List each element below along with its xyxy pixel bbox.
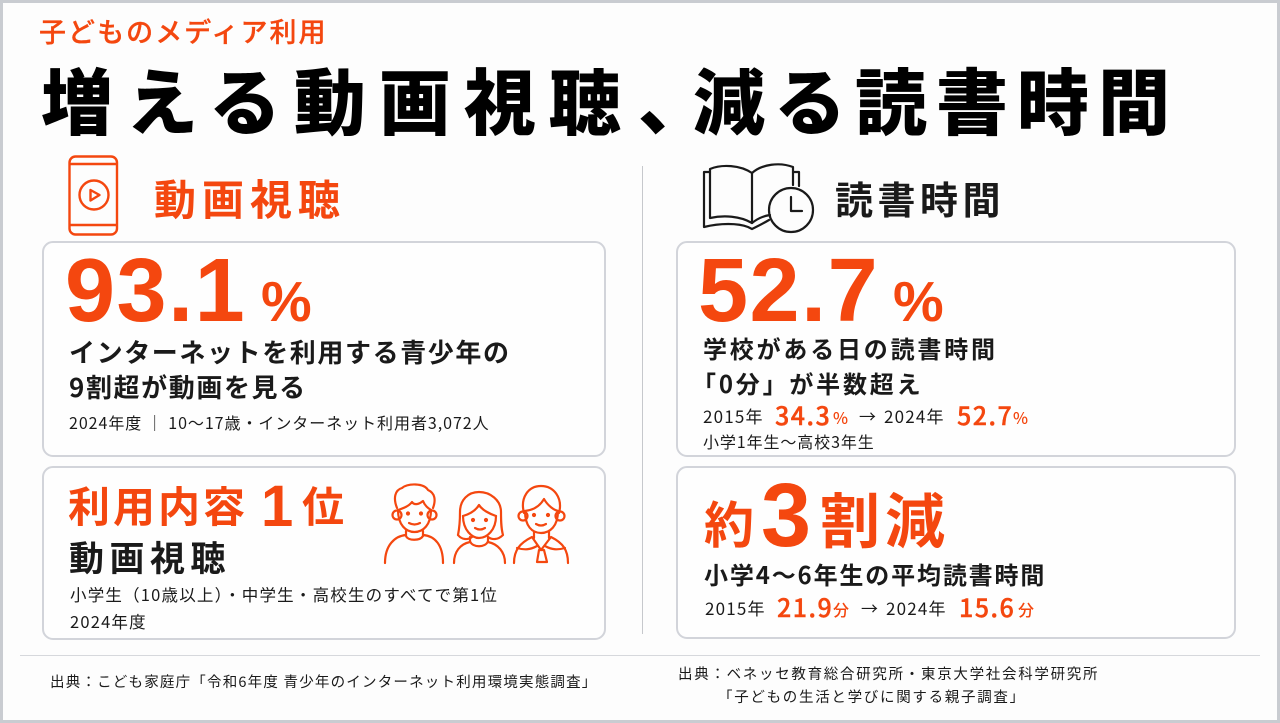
comparison: 2015 to 2024 minutes: → [861,595,879,620]
comparison: 2015 to 2024 minutes: 2015年 [705,595,766,620]
panel: 93.1% internet users watching video [42,241,606,457]
note: all school levels: 小学生（10歳以上）・中学生・高校生のすべてで第1位 [70,582,498,606]
stat: about: 約 [704,486,754,558]
comparison: 2015 to 2024 percent: 2015年 [703,403,764,428]
girl [454,492,505,563]
comparison: 2015 to 2024 minutes: 15.6 [959,589,1015,625]
stat unit: percent: % [261,270,312,334]
boy [385,484,443,563]
comparison: 2015 to 2024 percent: 52.7 [957,397,1013,433]
panel: top use [42,466,606,640]
heading: top use rank 1: 位 [302,474,347,535]
icon: smartphone with play button [68,155,118,236]
description: video viewing: 9割超が動画を見る [69,368,307,405]
icon: three children [384,483,570,564]
icon: open book with clock [702,163,814,234]
heading: top use rank 1: 1 [261,474,293,539]
stat: 93.1%: 93.1 [65,241,246,341]
comparison: 2015 to 2024 minutes [705,589,1034,625]
description: zero minutes: 学校がある日の読書時間 [703,330,998,365]
comparison: 2015 to 2024 percent: % [1013,405,1028,429]
source: right: 出典：ベネッセ教育総合研究所・東京大学社会科学研究所 [678,663,1099,684]
panel: 30 percent decrease [676,466,1236,639]
comparison: 2015 to 2024 percent: % [833,405,848,429]
source: right [678,663,1099,707]
heading: reading time: 読書時間 [835,170,1005,225]
subtitle: 子どものメディア利用 [39,11,328,50]
title: 減る読書時間 [693,45,1179,150]
description: video viewing: インターネットを利用する青少年の [69,333,511,370]
panel: 52.7% no reading [676,241,1236,457]
student in sailor uniform [514,486,568,563]
note: survey scope: 2024年度 ｜ 10～17歳・インターネット利用者3,072人 [69,410,490,434]
description: zero minutes: 「0分」が半数超え [692,365,923,400]
note: year: 2024年度 [70,609,147,633]
description: grades 4-6 average reading time: 小学4～6年生の平均読書時間 [704,556,1046,591]
comparison: 2015 to 2024 percent [703,397,1028,433]
title: 増える動画視聴 [41,45,634,150]
heading: top use rank 1 [68,474,347,539]
footer rule [20,655,1260,656]
stat: 52.7%: 52.7 [698,241,879,341]
divider line [642,166,643,634]
stat unit: percent: % [893,270,944,334]
subheading: video viewing: 動画視聴 [69,531,231,582]
description: zero minutes [692,330,998,400]
comparison: 2015 to 2024 minutes: 2024年 [886,595,947,620]
comparison: 2015 to 2024 percent: 2024年 [884,403,945,428]
source: right: 「子どもの生活と学びに関する親子調査」 [718,686,1026,707]
comparison: 2015 to 2024 minutes: 21.9 [777,589,833,625]
description: video viewing [69,333,511,405]
stat figure: 3: 3 [761,466,811,566]
comparison: 2015 to 2024 percent: 34.3 [775,397,831,433]
source: left: 出典：こども家庭庁「令和6年度 青少年のインターネット利用環境実態調査」 [50,671,598,692]
comparison: 2015 to 2024 minutes: 分 [833,597,849,621]
heading: video viewing: 動画視聴 [154,167,346,228]
comparison: 2015 to 2024 minutes: 分 [1018,597,1034,621]
stat text: decrease: 割減 [820,474,950,561]
note: grade range: 小学1年生～高校3年生 [703,429,875,453]
title [41,45,1179,150]
title: 、 [638,45,710,150]
comparison: 2015 to 2024 percent: → [859,403,877,428]
heading: top use rank 1: 利用内容 [68,474,248,535]
